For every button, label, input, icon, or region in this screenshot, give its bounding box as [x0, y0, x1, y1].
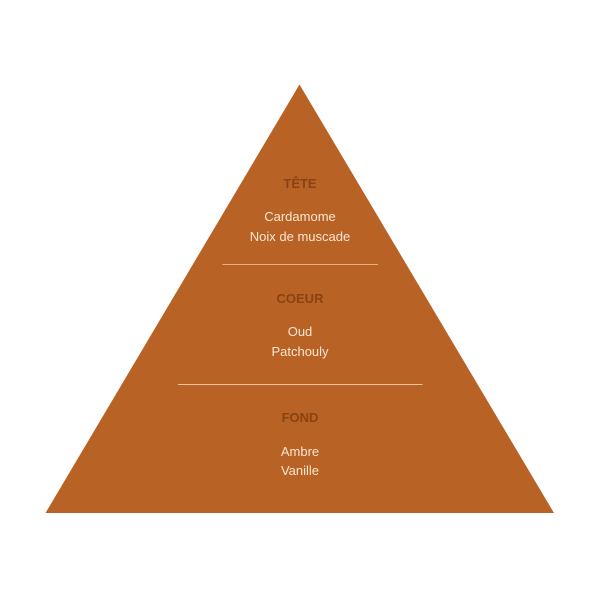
notes: fond: Vanille — [281, 463, 319, 478]
notes: fond: Ambre — [281, 444, 319, 459]
heading: fond: FOND — [282, 410, 318, 425]
notes: tête: Noix de muscade — [250, 229, 350, 244]
tier: tête — [250, 176, 350, 244]
notes: coeur: Patchouly — [271, 344, 329, 359]
notes: coeur: Oud — [288, 324, 312, 339]
notes: coeur — [271, 324, 329, 359]
tier: fond — [281, 410, 319, 478]
notes: tête: Cardamome — [264, 209, 336, 224]
heading: tête: TÊTE — [283, 176, 317, 191]
notes: tête — [250, 209, 350, 244]
notes: fond — [281, 444, 319, 478]
heading: coeur: COEUR — [277, 291, 324, 306]
tier: coeur — [271, 291, 329, 359]
pyramid triangle — [46, 84, 554, 513]
